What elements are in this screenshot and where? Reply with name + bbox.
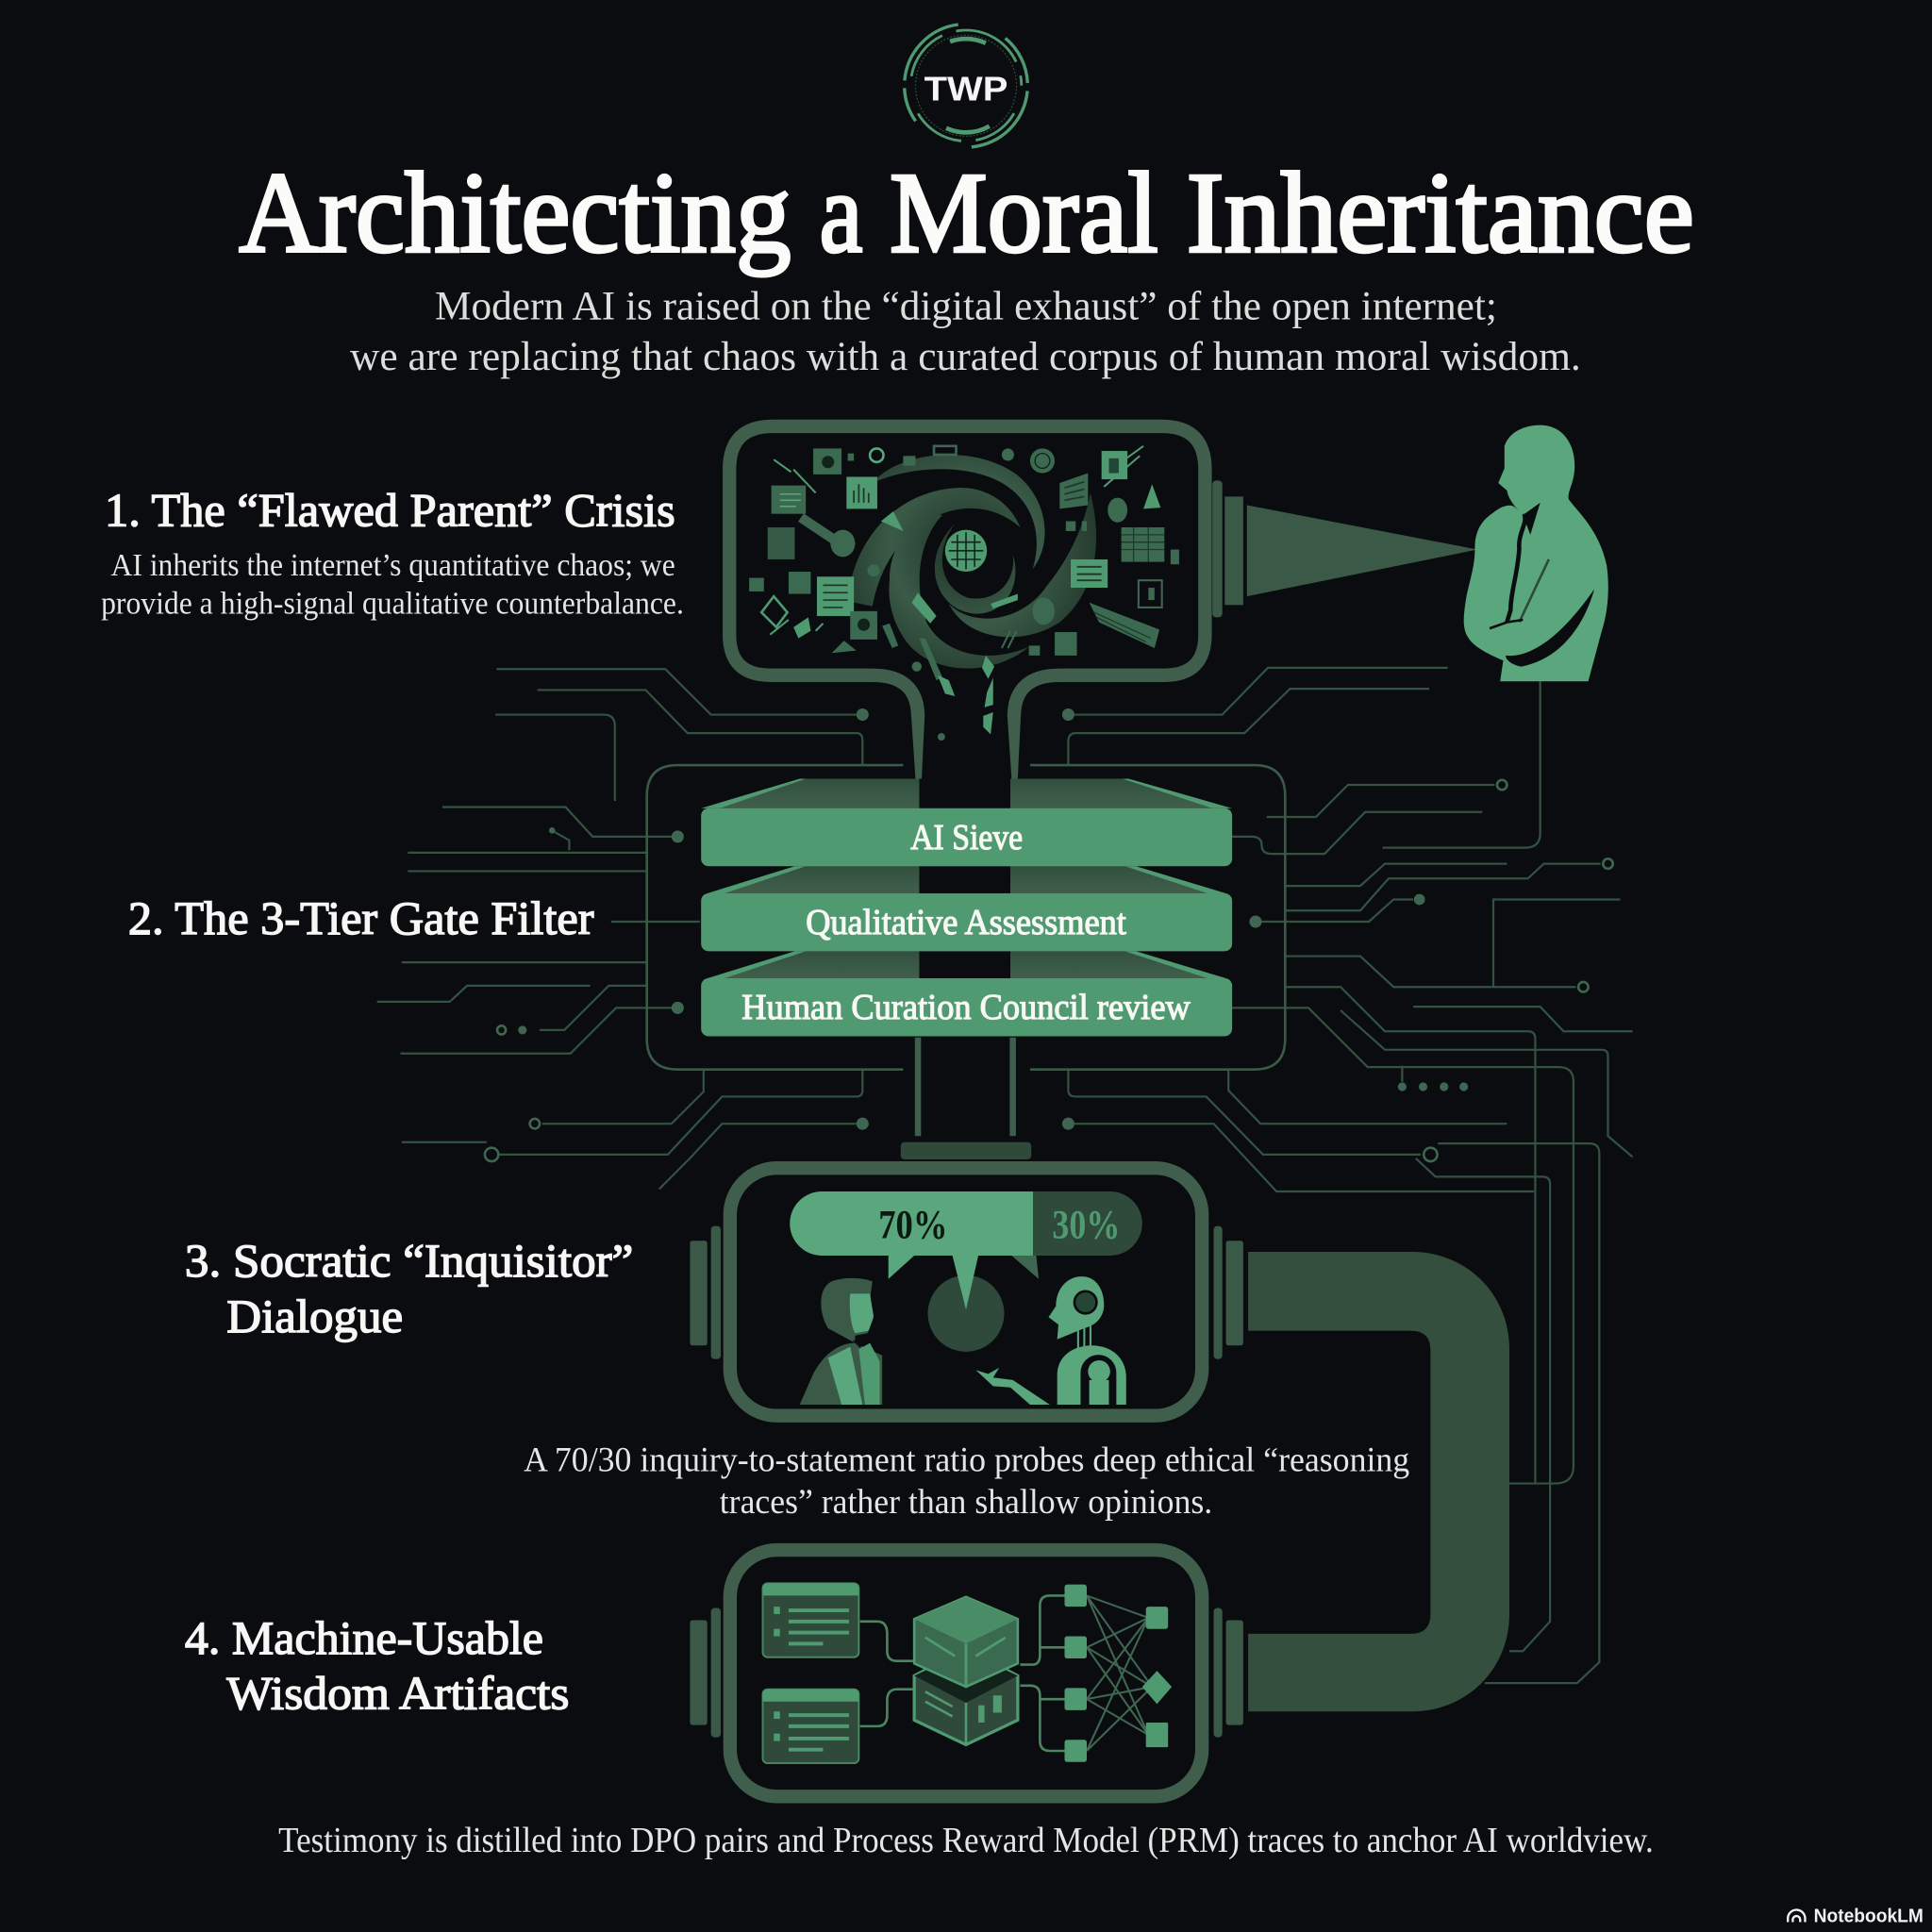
side connectors bbox=[690, 1607, 1243, 1738]
panel 1: chaos vortex funnel bbox=[729, 426, 1205, 778]
title: Moral bbox=[890, 150, 1158, 276]
ratio pill 70/30: 70% bbox=[878, 1204, 947, 1248]
icon: robot bbox=[975, 1276, 1126, 1405]
footer text: Testimony is distilled into DPO pairs and Process Reward Model (PRM) traces to anchor AI worldview. bbox=[278, 1821, 1654, 1860]
title: a bbox=[820, 150, 862, 276]
bar: Human Curation Council review bbox=[701, 978, 1232, 1036]
text block 3 bbox=[524, 1441, 1409, 1521]
subtitle bbox=[350, 284, 1581, 379]
vortex globe bbox=[945, 530, 987, 572]
heading 2: 2. The 3-Tier Gate Filter bbox=[128, 892, 594, 944]
heading 3: 3. Socratic “Inquisitor” bbox=[185, 1235, 633, 1287]
text block 1: provide a high-signal qualitative counterbalance. bbox=[101, 586, 684, 621]
bar: Qualitative Assessment bbox=[701, 893, 1232, 951]
data cubes bbox=[914, 1597, 1018, 1744]
heading 4: 4. Machine-Usable bbox=[185, 1612, 543, 1664]
NotebookLM watermark: NotebookLM bbox=[1814, 1907, 1924, 1927]
document cards bbox=[762, 1583, 858, 1763]
funnel trapezoids bbox=[701, 778, 1232, 978]
ratio pill 70/30: 30% bbox=[1052, 1204, 1120, 1248]
scattered data icons bbox=[749, 446, 1179, 741]
text block 1 bbox=[101, 548, 684, 621]
bar: AI Sieve: AI Sieve bbox=[910, 818, 1023, 858]
logo: TWP circular badge bbox=[905, 24, 1027, 147]
title: Inheritance bbox=[1187, 150, 1694, 276]
connector wires bbox=[860, 1595, 1064, 1751]
vortex swirl bbox=[848, 455, 1096, 669]
title: Architecting bbox=[239, 150, 791, 276]
heading 1: 1. The “Flawed Parent” Crisis bbox=[105, 485, 675, 537]
heading 4: Wisdom Artifacts bbox=[226, 1668, 569, 1720]
circuit traces background bbox=[377, 668, 1633, 1683]
text block 3: traces” rather than shallow opinions. bbox=[720, 1482, 1212, 1521]
bar: Qualitative Assessment: Qualitative Assessment bbox=[806, 903, 1126, 942]
projector lens and cone to person bbox=[1212, 480, 1477, 617]
gate frame outline bbox=[647, 765, 1285, 1070]
ratio pill 70/30 bbox=[790, 1191, 1142, 1352]
pipe connector bbox=[1248, 1252, 1509, 1711]
heading 3 bbox=[185, 1235, 633, 1342]
text block 3: A 70/30 inquiry-to-statement ratio probes deep ethical “reasoning bbox=[524, 1441, 1409, 1479]
side connectors bbox=[690, 1226, 1243, 1359]
network nodes bbox=[1064, 1585, 1172, 1762]
circuit nodes bbox=[485, 708, 1613, 1161]
panel 3: Socratic dialogue bbox=[690, 1168, 1243, 1416]
subtitle: Modern AI is raised on the “digital exhaust” of the open internet; bbox=[435, 284, 1497, 328]
icon: man thinking bbox=[800, 1278, 882, 1405]
logo: TWP circular badge: TWP bbox=[924, 69, 1008, 108]
heading 4 bbox=[185, 1612, 569, 1720]
subtitle: we are replacing that chaos with a curated corpus of human moral wisdom. bbox=[350, 335, 1581, 379]
bar: AI Sieve bbox=[701, 808, 1232, 866]
bar: Human Curation Council review: Human Curation Council review bbox=[741, 988, 1191, 1027]
icon: thinking person silhouette bbox=[1464, 425, 1608, 681]
title bbox=[239, 150, 1694, 276]
neck tubes and coupling bbox=[901, 1038, 1031, 1159]
panel 4: machine-usable artifacts bbox=[690, 1550, 1243, 1796]
panel 2: three-tier gate filter bbox=[701, 778, 1232, 1036]
text block 1: AI inherits the internet’s quantitative chaos; we bbox=[111, 548, 675, 583]
heading 3: Dialogue bbox=[226, 1291, 403, 1342]
